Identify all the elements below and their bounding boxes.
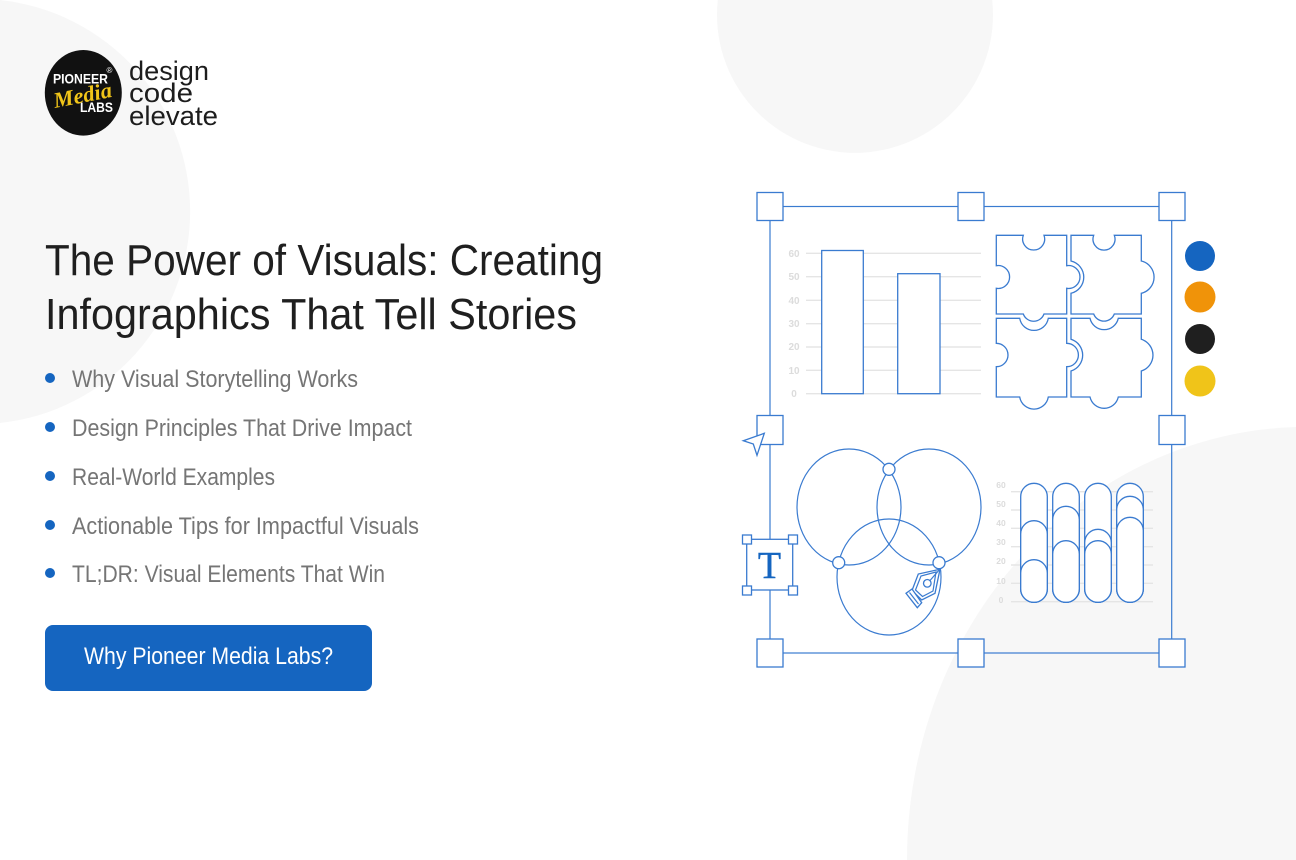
bullet list — [45, 366, 419, 588]
bar chart — [788, 249, 981, 400]
pill chart: 60 — [996, 480, 1006, 490]
bar chart: 20 — [788, 342, 800, 353]
logo: Pioneer Media Labs — [45, 50, 122, 136]
bar chart: 10 — [788, 366, 800, 377]
selection frame — [757, 192, 1185, 667]
bar chart: 0 — [791, 389, 797, 400]
pill chart — [996, 480, 1153, 605]
logo: Pioneer Media Labs: PIONEER — [53, 70, 108, 86]
bar chart: 40 — [788, 296, 800, 307]
pill chart: 40 — [996, 518, 1006, 528]
pill chart: 50 — [996, 499, 1006, 509]
tagline — [129, 56, 218, 131]
logo: Pioneer Media Labs: Media — [50, 77, 114, 113]
tagline: elevate — [129, 101, 218, 131]
colour swatches — [1184, 241, 1216, 396]
bar chart: 50 — [788, 272, 800, 283]
title: The Power of Visuals: Creating — [45, 236, 603, 285]
pill chart: 0 — [999, 595, 1004, 605]
logo: Pioneer Media Labs: LABS — [80, 100, 113, 115]
tagline: code — [129, 78, 193, 108]
bullet list: Real-World Examples — [72, 464, 275, 491]
text tool box: T — [758, 545, 781, 587]
bullet list: TL;DR: Visual Elements That Win — [72, 561, 385, 588]
bullet list: Design Principles That Drive Impact — [72, 415, 412, 442]
icon: pen nib — [906, 569, 940, 608]
tagline: design — [129, 56, 209, 86]
title — [45, 236, 603, 339]
logo: Pioneer Media Labs: ® — [106, 66, 112, 75]
icon: cursor arrow — [743, 433, 764, 455]
button: Why Pioneer Media Labs? — [84, 643, 333, 670]
title: Infographics That Tell Stories — [45, 290, 577, 339]
button — [45, 625, 372, 691]
pill chart: 20 — [996, 556, 1006, 566]
pill chart: 30 — [996, 537, 1006, 547]
bar chart: 60 — [788, 249, 800, 260]
venn diagram — [797, 449, 981, 635]
bullet list: Why Visual Storytelling Works — [72, 366, 358, 393]
bar chart: 30 — [788, 319, 800, 330]
bullet list: Actionable Tips for Impactful Visuals — [72, 513, 419, 540]
text tool box — [742, 535, 798, 595]
pill chart: 10 — [996, 576, 1006, 586]
puzzle pieces — [996, 235, 1154, 409]
